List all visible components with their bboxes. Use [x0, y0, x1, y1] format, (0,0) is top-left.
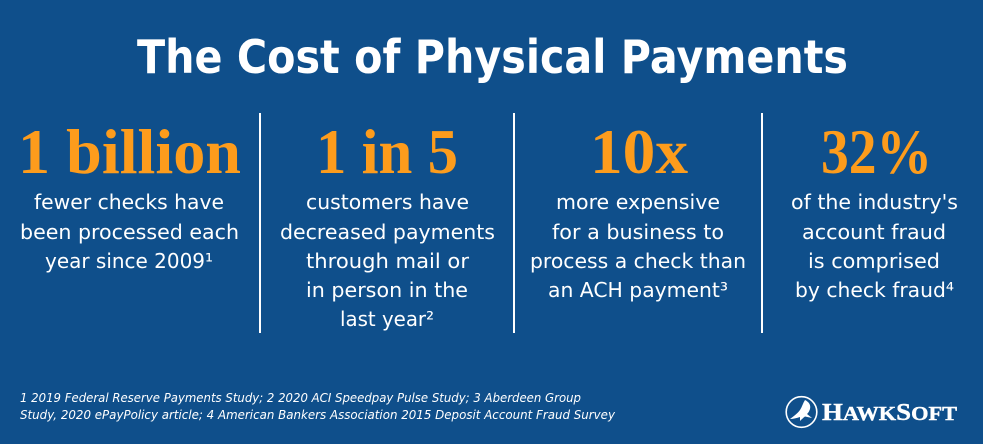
text: fewer checks: year since 2009¹ — [45, 249, 213, 273]
footnotes: 1 2019 Federal Reserve Payments Study; 2 2020 ACI Speedpay Pulse Study; 3 Aberdeen Group — [20, 391, 581, 405]
text: fewer checks: been processed each — [20, 220, 239, 244]
text: more expensive: process a check than — [530, 249, 746, 273]
text: more expensive: an ACH payment³ — [548, 278, 728, 302]
panel: 32% — [791, 116, 958, 302]
text: fewer checks: fewer checks have — [34, 190, 224, 214]
stat: 1 in 5: 1 in 5 — [316, 116, 458, 187]
stat: 32%: 32% — [821, 116, 932, 187]
panel: 1 billion — [18, 116, 241, 273]
stat: 10x: 10x — [590, 116, 688, 187]
text: account fraud: is comprised — [808, 249, 940, 273]
text: more expensive: more expensive — [556, 190, 720, 214]
text: account fraud: account fraud — [802, 220, 946, 244]
text: customers: customers have — [306, 190, 469, 214]
text: more expensive: for a business to — [552, 220, 724, 244]
title: The Cost of Physical Payments — [137, 30, 848, 84]
text: customers: decreased payments — [280, 220, 495, 244]
text: customers: in person in the — [306, 278, 468, 302]
text: customers — [280, 190, 495, 331]
stat: 1 billion: 1 billion — [18, 116, 241, 187]
footnotes: Study, 2020 ePayPolicy article; 4 American Bankers Association 2015 Deposit Account Fraud Survey — [20, 408, 616, 422]
text: more expensive — [530, 190, 746, 302]
wordmark: HAWKSOFT — [822, 400, 958, 426]
icon: hawk — [786, 397, 817, 427]
text: account fraud — [791, 190, 958, 302]
text: fewer checks — [20, 190, 239, 273]
text: customers: through mail or — [306, 249, 470, 273]
logo: HawkSoft — [786, 397, 958, 427]
text: account fraud: by check fraud⁴ — [795, 278, 954, 302]
text: customers: last year² — [340, 307, 434, 331]
panel: 1 in 5 — [280, 116, 495, 331]
footnotes — [20, 391, 616, 422]
text: account fraud: of the industry's — [791, 190, 958, 214]
panel: 10x — [530, 116, 746, 302]
